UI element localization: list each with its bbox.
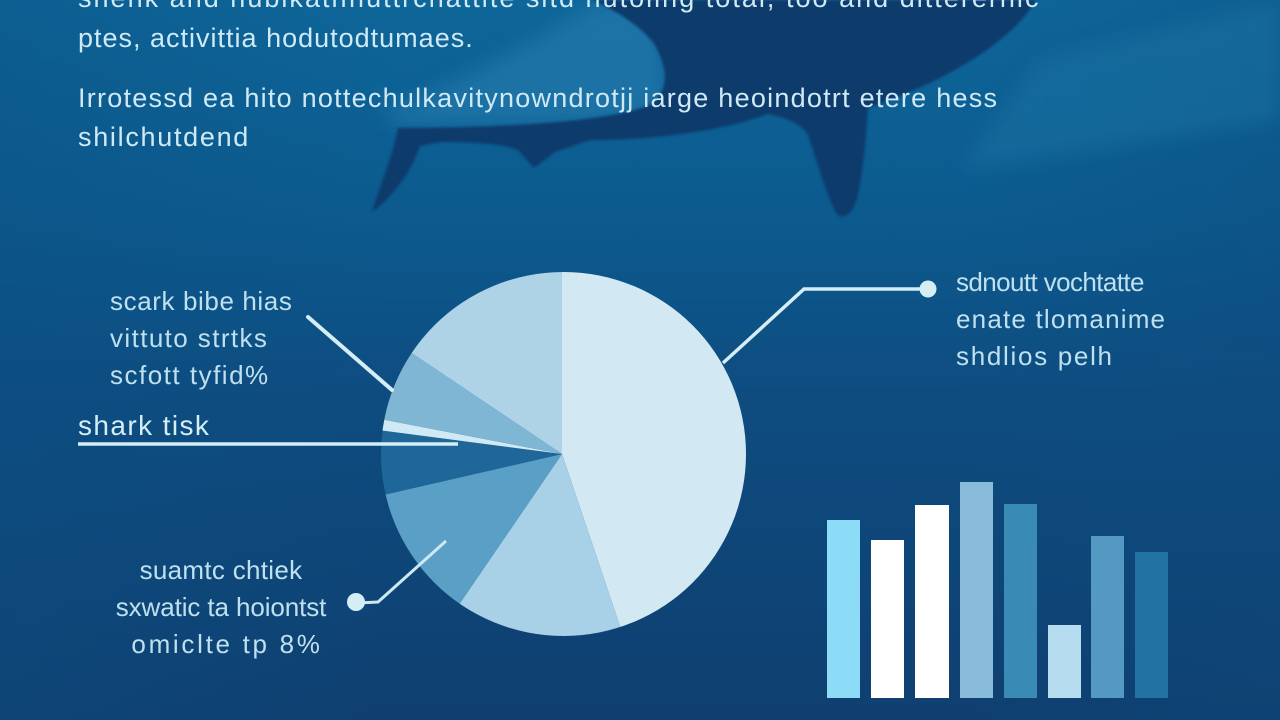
bar 2 <box>871 540 904 698</box>
text block: second paragraph: shilchutdend <box>78 122 250 152</box>
pie slice: lower light <box>460 454 620 636</box>
leader: top left <box>308 317 392 390</box>
label: bottom left callout: sxwatic ta hoiontst <box>116 592 326 622</box>
bar chart <box>827 482 1168 698</box>
label: bottom left callout <box>116 555 326 659</box>
text block: second paragraph: Irrotessd ea hito nottechulkavitynowndrotjj iarge heoindotrt etere hess <box>78 83 998 113</box>
bar 8 <box>1135 552 1168 698</box>
pie slice: largest <box>562 272 746 627</box>
shark <box>360 0 1036 216</box>
bar 5 <box>1004 504 1037 698</box>
label: bottom left callout: omiclte tp 8% <box>131 629 323 659</box>
label: bottom left callout: suamtc chtiek <box>140 555 302 585</box>
label: shark risk: shark tisk <box>78 410 210 441</box>
text block: second paragraph <box>78 83 998 152</box>
label: top left callout <box>110 286 292 390</box>
leader: top right <box>723 280 936 363</box>
pie chart <box>381 272 746 636</box>
pie slice: medium <box>384 353 562 454</box>
bar 7 <box>1091 536 1124 698</box>
bar 1 <box>827 520 860 698</box>
leader: shark risk underline <box>78 442 458 446</box>
label: top right callout <box>956 267 1166 371</box>
pie slice: upper light <box>412 272 562 454</box>
bar 3 <box>915 505 949 698</box>
label: top right callout: enate tlomanime <box>956 304 1166 334</box>
label: top right callout: shdlios pelh <box>956 341 1114 371</box>
label: top left callout: scark bibe hias <box>110 286 292 316</box>
bar 6 <box>1048 625 1081 698</box>
pie slice: thin white <box>382 420 561 454</box>
bar 4 <box>960 482 993 698</box>
label: top left callout: vittuto strtks <box>110 323 268 353</box>
leader: bottom left <box>347 541 446 611</box>
pie slice: dark <box>381 430 562 494</box>
text block: intro paragraph: ptes, activittia hodutodtumaes. <box>78 23 474 53</box>
label: top right callout: sdnoutt vochtatte <box>956 267 1144 297</box>
label: top left callout: scfott tyfid% <box>110 360 270 390</box>
text block: intro paragraph <box>78 0 1040 53</box>
pie slice: mid blue <box>386 454 562 604</box>
